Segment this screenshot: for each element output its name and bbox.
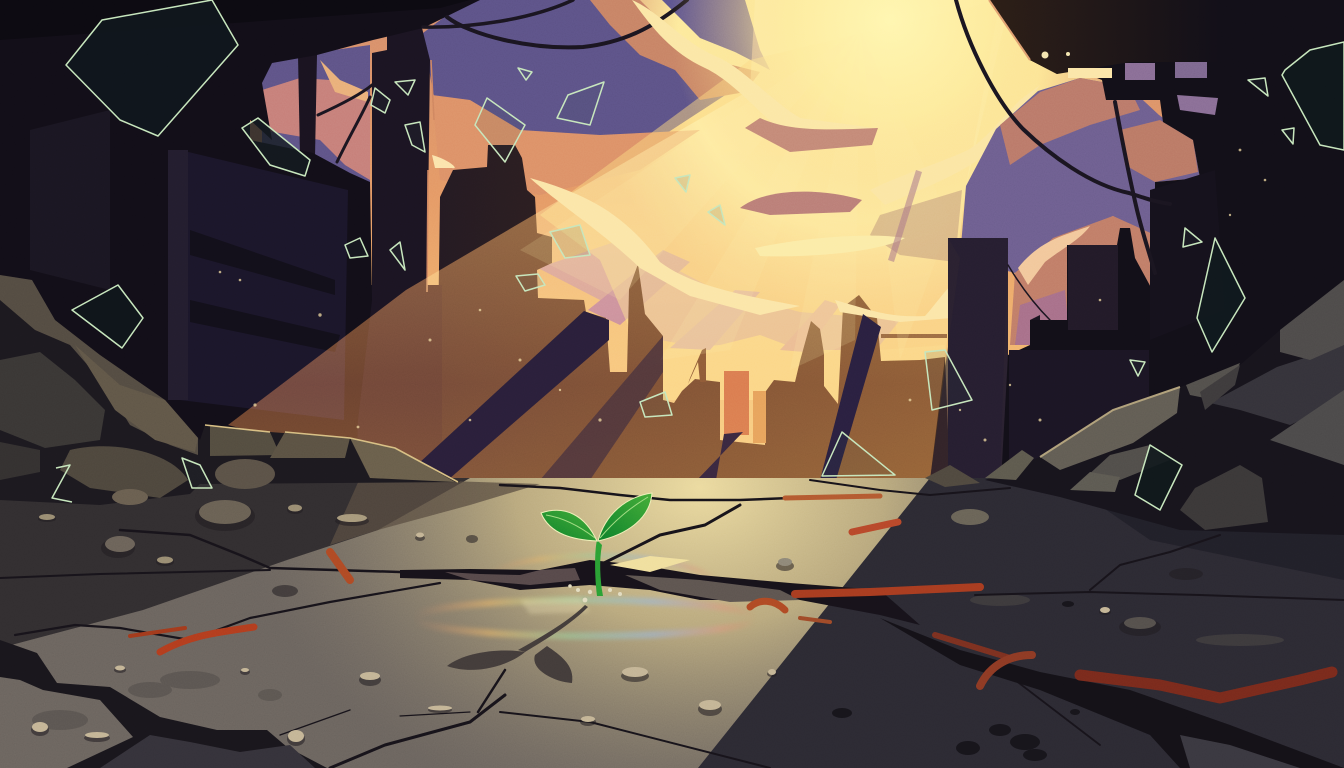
floating glass shards	[52, 0, 1344, 510]
warm wash of sunlight across the sky	[540, 0, 1000, 400]
right ground shadow	[698, 478, 1344, 768]
ground stains	[32, 594, 1284, 730]
left ruined building foreground	[0, 0, 480, 482]
dust particles	[219, 149, 1266, 442]
shadow bands across the city	[405, 170, 1008, 486]
seedling cast shadow	[447, 605, 588, 683]
thin ground cracks	[0, 480, 1344, 768]
right rubble pile	[925, 280, 1344, 535]
cracked concrete ground	[0, 478, 1344, 768]
purple clouds left	[262, 0, 770, 195]
scattered rocks	[31, 500, 1203, 761]
foreground right crack	[880, 618, 1344, 768]
sky background with sun disc	[0, 0, 1344, 490]
rusted rebar	[130, 496, 1332, 698]
purple clouds right	[960, 78, 1200, 345]
right hanging cables	[956, 0, 1170, 320]
seedling sprout	[541, 493, 652, 596]
left hanging cables	[318, 0, 687, 162]
left ground shadow	[0, 478, 540, 648]
right ruined building foreground	[989, 0, 1344, 500]
far right tower	[948, 238, 1040, 480]
tall left tower	[298, 28, 442, 481]
pink haze bands low in the sky	[538, 240, 945, 400]
secondary sky rays	[520, 30, 950, 370]
sun bloom over the beam	[670, 0, 1110, 240]
right leaf	[598, 493, 652, 541]
city silhouette mass	[436, 145, 950, 480]
left rubble pile	[0, 275, 460, 505]
main sun beam lighting the city	[228, 0, 1010, 480]
left leaf	[541, 510, 597, 541]
salmon towers in the skyline	[724, 371, 766, 443]
foreground left crack	[0, 640, 327, 768]
central wide crack	[400, 556, 920, 625]
stem	[595, 540, 603, 596]
sunlit clouds near the sun	[530, 0, 1040, 322]
oil rainbow sheen on concrete	[415, 555, 755, 636]
